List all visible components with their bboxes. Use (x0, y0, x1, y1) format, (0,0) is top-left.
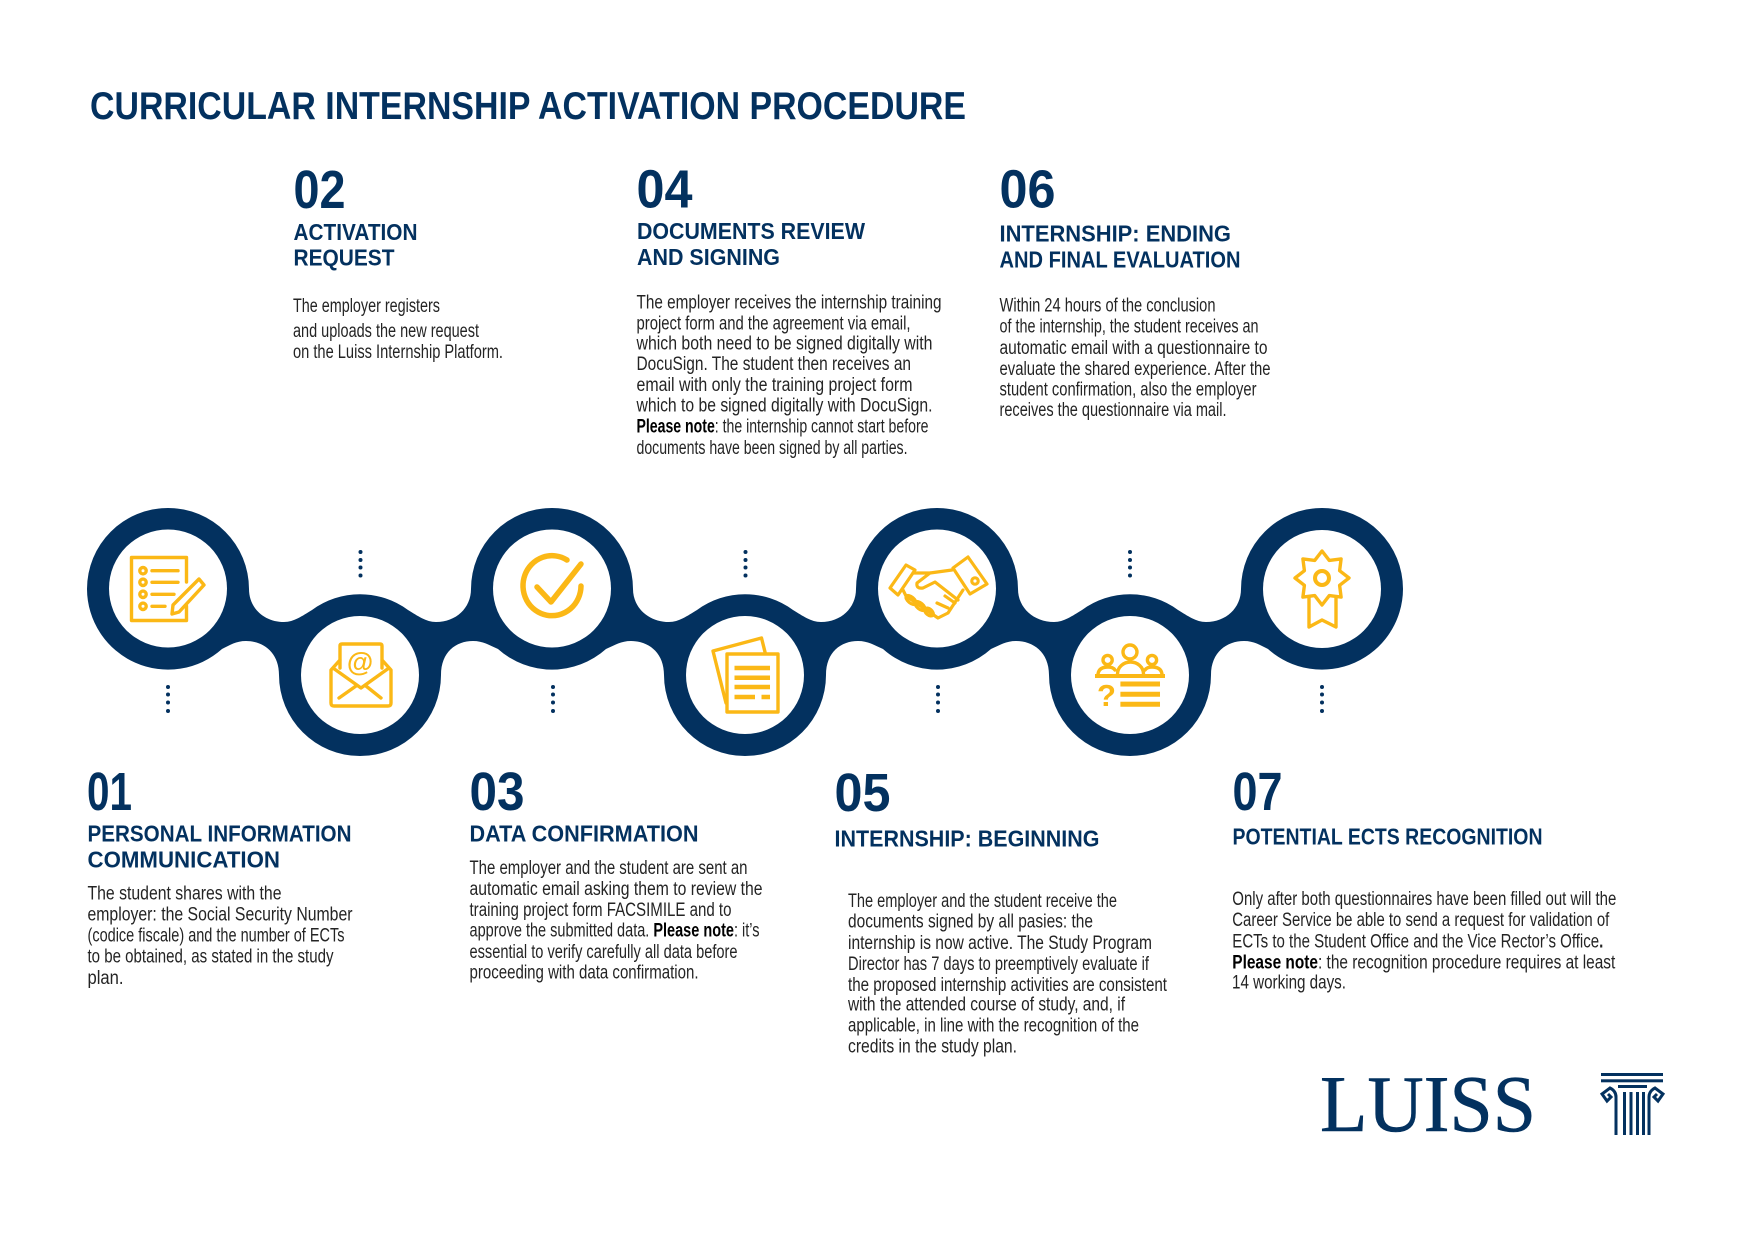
icon: handshake (890, 557, 987, 618)
step 06 heading: AND FINAL EVALUATION (1000, 246, 1240, 272)
step 03 body text: training project form FACSIMILE and to (470, 900, 732, 921)
step 07: potential ECTS recognition (1232, 762, 1616, 993)
dotted connector: step 02 (358, 550, 362, 578)
step 01 body text: (codice fiscale) and the number of ECTs (88, 926, 344, 947)
step 07 body text: 14 working days. (1232, 972, 1346, 993)
step 02 body text: and uploads the new request (293, 321, 480, 342)
step 01 number: 01 (87, 762, 132, 822)
step 04 body text: documents have been signed by all parties. (636, 438, 908, 459)
icon: check mark in circle (523, 556, 581, 616)
step 04 body text: DocuSign. The student then receives an (636, 354, 911, 375)
step 02 heading (294, 219, 418, 271)
step 07 body text (1232, 889, 1616, 993)
title: CURRICULAR INTERNSHIP ACTIVATION PROCEDURE (90, 85, 966, 128)
logo: LUISS wordmark: LUISS (1320, 1061, 1536, 1149)
step 01 body text: employer: the Social Security Number (88, 905, 353, 926)
step 05 body text: credits in the study plan. (848, 1037, 1017, 1058)
step 06 body text: student confirmation, also the employer (1000, 380, 1257, 401)
icon: stacked documents (713, 638, 778, 712)
step 01 body text: plan. (88, 968, 124, 989)
step 04 number: 04 (636, 160, 692, 220)
step 04: documents review and signing (636, 160, 942, 459)
step 06 body text: receives the questionnaire via mail. (1000, 400, 1226, 421)
step 05 body text: The employer and the student receive the (848, 891, 1117, 912)
icon: checklist with pencil (132, 558, 204, 620)
step 01 heading: PERSONAL INFORMATION (88, 820, 352, 846)
icon: envelope with at sign: @ (347, 647, 373, 677)
dotted connector: step 07 (1320, 685, 1324, 713)
step 03 body text: The employer and the student are sent an (470, 858, 748, 879)
icon: people with questionnaire (1095, 645, 1165, 713)
step 03 body text: approve the submitted data. Please note: it’s (470, 921, 760, 942)
step 06 body text (1000, 296, 1270, 421)
step 07 body text: ECTs to the Student Office and the Vice Rector’s Office. (1232, 931, 1603, 952)
step 07 heading: POTENTIAL ECTS RECOGNITION (1232, 824, 1542, 850)
step 02 body text: The employer registers (293, 296, 440, 317)
step 03 body text: essential to verify carefully all data before (470, 942, 738, 963)
step 04 body text (636, 292, 942, 459)
step 01 body text: The student shares with the (88, 883, 282, 904)
step 05 body text: internship is now active. The Study Program (848, 933, 1152, 954)
step 05 number: 05 (834, 763, 890, 823)
dotted connector: step 01 (166, 685, 170, 713)
dotted connector: step 03 (551, 685, 555, 713)
icon: envelope with at sign (331, 644, 391, 706)
step 04 heading: AND SIGNING (637, 244, 780, 270)
step 07 body text: Please note: the recognition procedure requires at least (1232, 952, 1616, 973)
icon: award rosette (1295, 551, 1349, 627)
step 05 body text (847, 891, 1168, 1058)
dotted connector: step 04 (744, 550, 748, 578)
timeline band with seven circles (87, 508, 1403, 756)
step 07 number: 07 (1232, 762, 1282, 822)
step 04 heading: DOCUMENTS REVIEW (637, 218, 866, 244)
step 04 body text: Please note: the internship cannot start before (636, 417, 928, 438)
step 05 body text: the proposed internship activities are consistent (848, 975, 1168, 996)
step 05: internship beginning (834, 763, 1168, 1058)
step 04 body text: which both need to be signed digitally with (636, 333, 932, 354)
step 03 body text (470, 858, 762, 983)
step 02 heading: ACTIVATION (294, 219, 418, 245)
logo: column emblem (1601, 1073, 1663, 1135)
step 02 number: 02 (294, 160, 346, 220)
dotted connector: step 05 (936, 685, 940, 713)
step 06 heading: INTERNSHIP: ENDING (1000, 220, 1231, 246)
step 06 heading (1000, 220, 1240, 272)
step 06 body text: evaluate the shared experience. After the (1000, 359, 1270, 380)
step 03 heading: DATA CONFIRMATION (470, 821, 698, 847)
step 05 heading: INTERNSHIP: BEGINNING (834, 826, 1100, 852)
step 01 body text (88, 883, 353, 989)
step 06 body text: automatic email with a questionnaire to (1000, 338, 1268, 359)
step 07 body text: Only after both questionnaires have been filled out will the (1232, 889, 1616, 910)
step 04 body text: project form and the agreement via email, (636, 313, 910, 334)
step 02: activation request (293, 160, 503, 363)
step 05 body text: with the attended course of study, and, if (847, 995, 1126, 1016)
step 02 heading: REQUEST (294, 245, 395, 271)
step 05 body text: Director has 7 days to preemptively evaluate if (848, 954, 1150, 975)
step 05 body text: applicable, in line with the recognition of the (848, 1016, 1139, 1037)
white circle openings (109, 530, 1381, 734)
step 04 body text: which to be signed digitally with DocuSign. (636, 396, 932, 417)
icon: people with questionnaire: ? (1097, 678, 1116, 713)
step 01 body text: to be obtained, as stated in the study (88, 947, 334, 968)
step 04 body text: email with only the training project form (636, 375, 912, 396)
dotted connector: step 06 (1128, 550, 1132, 578)
step 02 body text (293, 296, 503, 363)
step 01 heading: COMMUNICATION (88, 846, 280, 872)
step 01: personal information communication (87, 762, 353, 989)
step 03 number: 03 (470, 762, 524, 822)
step 06: internship ending and final evaluation (1000, 160, 1270, 421)
step 06 body text: of the internship, the student receives an (1000, 317, 1258, 338)
step 07 body text: Career Service be able to send a request for validation of (1232, 910, 1610, 931)
step 04 body text: The employer receives the internship training (636, 292, 942, 313)
step 03 body text: automatic email asking them to review the (470, 879, 762, 900)
step 05 body text: documents signed by all pasies: the (848, 912, 1093, 933)
step 02 body text: on the Luiss Internship Platform. (293, 342, 503, 363)
step 01 heading (88, 820, 352, 872)
step 06 number: 06 (1000, 160, 1056, 220)
step 04 heading (637, 218, 866, 270)
navy winding band (87, 508, 1403, 756)
step 03: data confirmation (470, 762, 762, 983)
step 03 body text: proceeding with data confirmation. (470, 962, 698, 983)
step 06 body text: Within 24 hours of the conclusion (1000, 296, 1216, 317)
